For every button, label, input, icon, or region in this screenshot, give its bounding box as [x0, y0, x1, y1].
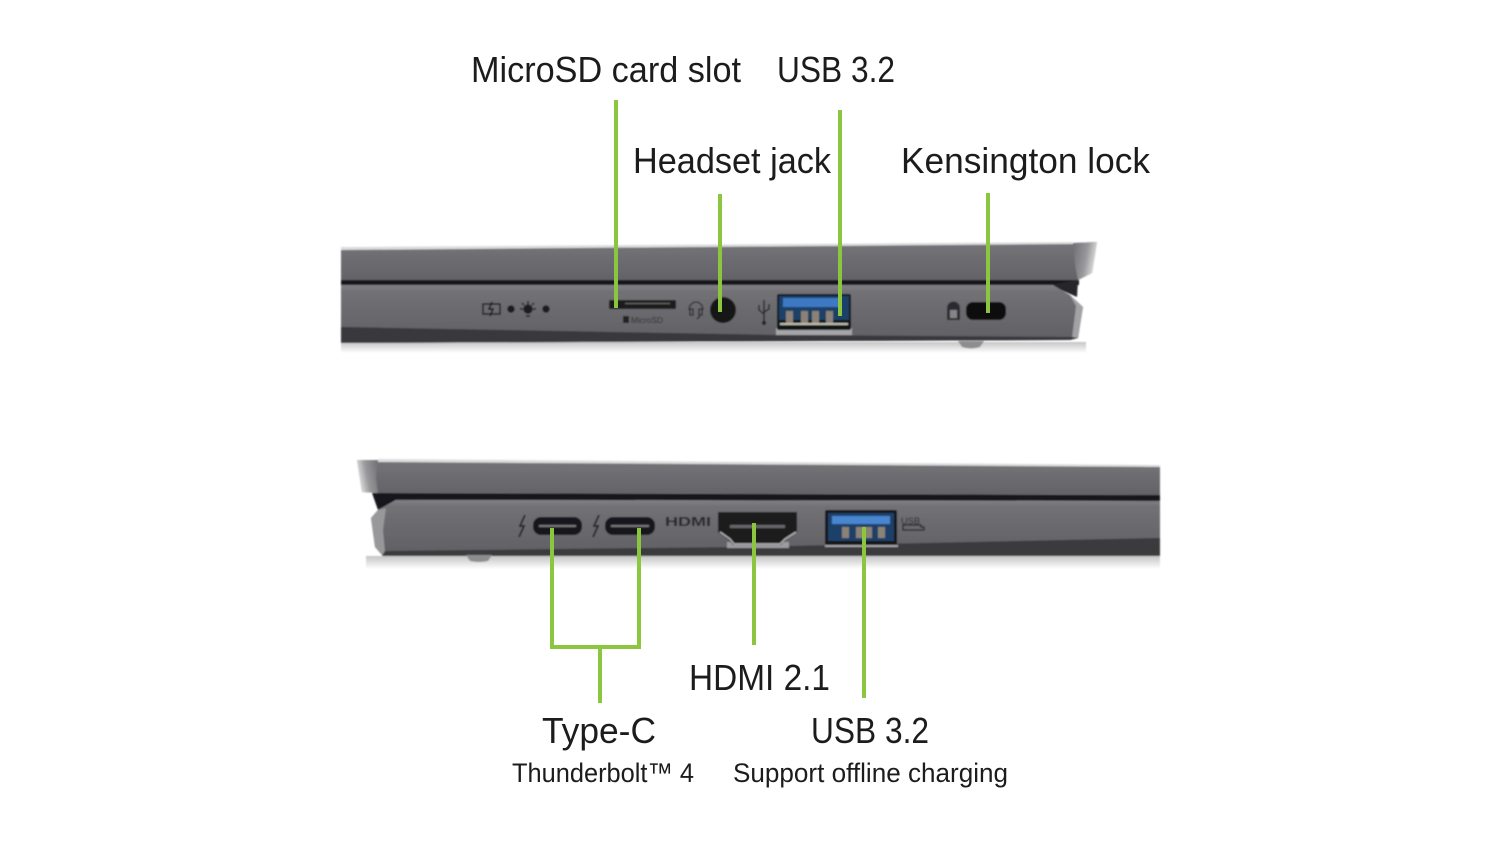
label: USB 3.2 top: USB 3.2 — [777, 49, 895, 90]
sublabel: Thunderbolt 4: Thunderbolt™ 4 — [512, 758, 694, 788]
HDMI logo text: HDMI — [665, 514, 711, 529]
icon: USB charging: USB — [901, 516, 920, 526]
label: HDMI 2.1: HDMI 2.1 — [689, 657, 830, 698]
USB 3.2 port — [759, 294, 852, 335]
USB 3.2 charging port — [825, 510, 898, 547]
leader line: Kensington lock — [986, 193, 990, 313]
microSD card slot — [609, 300, 676, 325]
label: MicroSD card slot: MicroSD card slot — [471, 49, 741, 90]
sublabel: Support offline charging: Support offline charging — [733, 758, 1008, 788]
headset jack — [689, 297, 736, 323]
microSD card slot: MicroSD — [631, 316, 663, 325]
laptop: top side view — [341, 242, 1097, 353]
bracket: Type-C — [552, 528, 639, 703]
leader line: microSD — [614, 100, 618, 308]
HDMI port — [718, 512, 797, 548]
leader line: HDMI — [752, 523, 756, 645]
icon: status indicators — [483, 301, 549, 316]
label: Type-C: Type-C — [542, 710, 656, 751]
label: Headset jack: Headset jack — [633, 140, 832, 181]
Kensington lock — [947, 302, 1006, 320]
icon: USB charging — [901, 516, 924, 530]
leader line: USB 3.2 bottom — [862, 527, 866, 698]
Thunderbolt Type-C ports — [519, 515, 655, 537]
label: USB 3.2 bottom: USB 3.2 — [811, 710, 929, 751]
label: Kensington lock: Kensington lock — [901, 140, 1151, 181]
leader line: headset jack — [718, 194, 722, 312]
leader line: USB 3.2 top — [838, 110, 842, 316]
laptop: bottom side view — [357, 459, 1160, 569]
